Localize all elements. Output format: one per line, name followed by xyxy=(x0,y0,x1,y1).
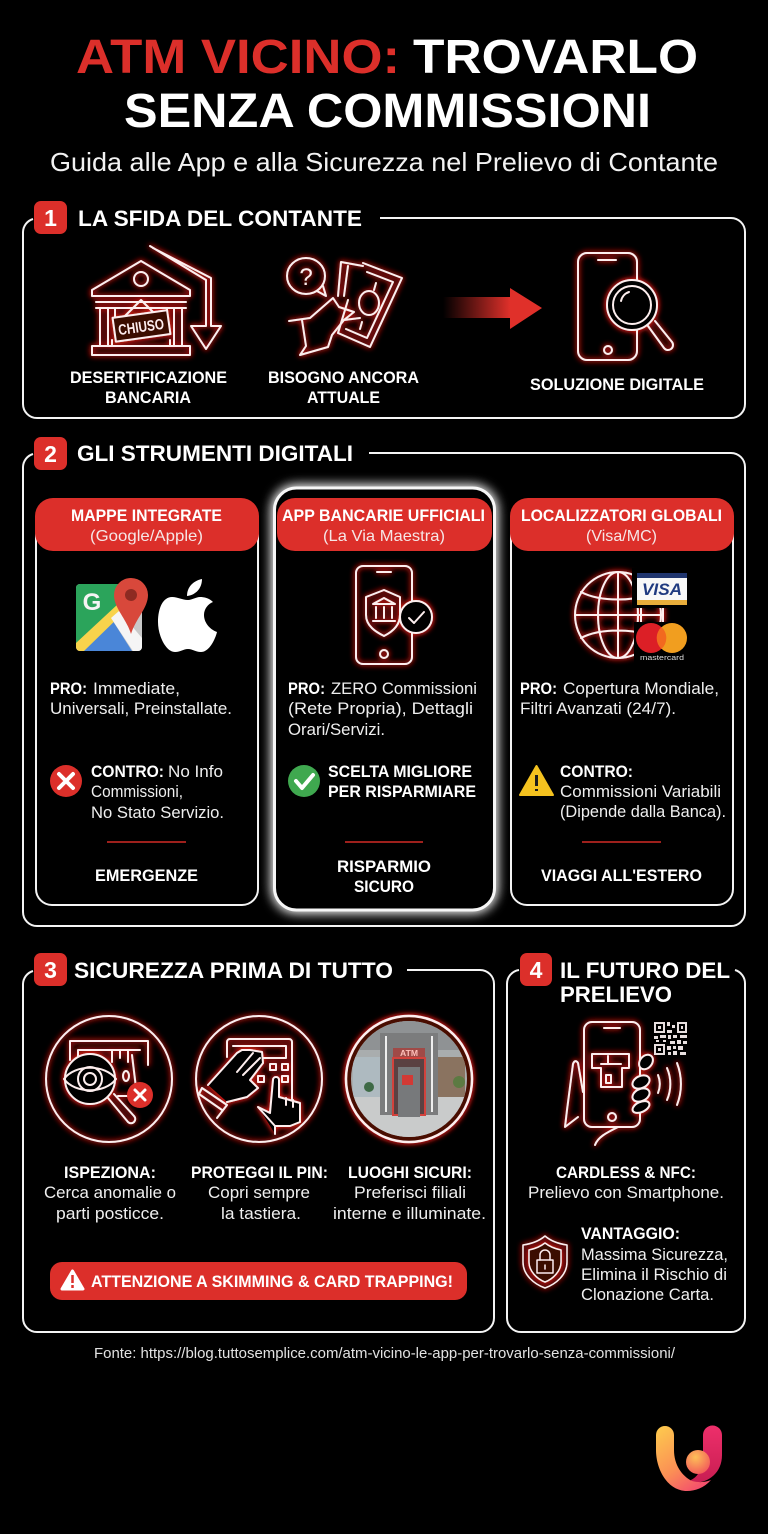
icon: red x badge xyxy=(127,1082,153,1108)
tip: ispeziona: Cerca anomalie o xyxy=(44,1183,176,1202)
title: ATM VICINO: xyxy=(76,31,400,84)
title: SENZA COMMISSIONI xyxy=(124,85,651,138)
pro text xyxy=(520,679,719,718)
best choice text xyxy=(328,762,476,801)
advantage text: Elimina il Rischio di xyxy=(581,1265,727,1284)
advantage text: Clonazione Carta. xyxy=(581,1285,714,1304)
card header: LOCALIZZATORI GLOBALI xyxy=(521,507,722,525)
tip: luoghi sicuri: LUOGHI SICURI: xyxy=(348,1163,472,1182)
pro text: Immediate, xyxy=(93,679,180,698)
heading: gli strumenti digitali: GLI STRUMENTI DIGITALI xyxy=(77,441,353,466)
label: bisogno ancora attuale: ATTUALE xyxy=(307,389,380,407)
heading: la sfida del contante: LA SFIDA DEL CONTANTE xyxy=(78,206,362,231)
card header xyxy=(35,498,259,551)
tip: proteggi il pin: Copri sempre xyxy=(208,1183,310,1202)
icon: visa card: VISA xyxy=(642,580,682,599)
contro text: Commissioni Variabili xyxy=(560,782,721,801)
use case: viaggi all'estero: VIAGGI ALL'ESTERO xyxy=(541,866,702,885)
icon: hand holding cash with question: ? xyxy=(299,264,313,291)
icon: globe xyxy=(575,572,663,658)
icon: qr code xyxy=(654,1022,687,1055)
source line: Fonte: https://blog.tuttosemplice.com/atm-vicino-le-app-per-trovarlo-senza-commissioni/ xyxy=(94,1346,676,1362)
card header xyxy=(510,498,734,551)
icon: inspect eye xyxy=(46,1016,172,1142)
title: TROVARLO xyxy=(413,31,698,84)
icon: warning xyxy=(520,766,553,795)
heading: il futuro del prelievo: PRELIEVO xyxy=(560,982,672,1007)
icon: closed bank with falling arrow xyxy=(92,246,221,355)
icon: visa card xyxy=(632,568,690,608)
advantage text: VANTAGGIO: xyxy=(581,1224,680,1243)
feature text: Prelievo con Smartphone. xyxy=(528,1183,724,1202)
contro text: CONTRO: xyxy=(91,762,164,781)
label: bisogno ancora attuale: BISOGNO ANCORA xyxy=(268,369,419,387)
tip: proteggi il pin: PROTEGGI IL PIN: xyxy=(191,1163,328,1182)
advantage text xyxy=(581,1224,728,1304)
arrow xyxy=(443,288,542,329)
icon: shield lock xyxy=(523,1236,567,1288)
label: desertificazione bancaria: BANCARIA xyxy=(105,389,191,407)
icon: google maps: G xyxy=(83,589,101,616)
tip: ispeziona: parti posticce. xyxy=(56,1204,164,1223)
panel: gli strumenti digitali xyxy=(23,437,745,926)
pro text: ZERO Commissioni xyxy=(331,679,477,698)
tip: ispeziona xyxy=(44,1163,176,1223)
card header: (La Via Maestra) xyxy=(323,528,445,545)
contro text: (Dipende dalla Banca). xyxy=(560,802,726,821)
photo: atm in safe lobby: ATM xyxy=(400,1049,418,1058)
use case: emergenze: EMERGENZE xyxy=(95,866,198,885)
label: desertificazione bancaria xyxy=(70,369,227,407)
contro text xyxy=(560,762,726,821)
icon: green check xyxy=(288,765,320,797)
card: localizzatori globali xyxy=(510,498,734,905)
icon: phone in hand with card xyxy=(565,1022,681,1145)
icon: red x xyxy=(50,765,82,797)
alert banner: ATTENZIONE A SKIMMING & CARD TRAPPING! xyxy=(91,1272,453,1291)
pro text: Orari/Servizi. xyxy=(288,720,385,739)
title xyxy=(76,31,698,138)
label: soluzione digitale: SOLUZIONE DIGITALE xyxy=(530,376,704,394)
pro text xyxy=(50,679,232,718)
pro text xyxy=(288,679,477,739)
panel: la sfida del contante xyxy=(23,201,745,418)
icon: bank app on phone xyxy=(356,566,432,664)
section badge 1: 1 xyxy=(44,205,57,231)
logo xyxy=(656,1426,722,1491)
pro text: (Rete Propria), Dettagli xyxy=(288,699,473,718)
subtitle: Guida alle App e alla Sicurezza nel Prelievo di Contante xyxy=(50,147,718,177)
pro text: PRO: xyxy=(288,679,325,698)
label: desertificazione bancaria: DESERTIFICAZIONE xyxy=(70,369,227,387)
section badge 4: 4 xyxy=(530,957,543,983)
photo: atm in safe lobby xyxy=(346,1016,472,1142)
section badge 3: 3 xyxy=(44,957,57,983)
pro text: PRO: xyxy=(520,679,557,698)
section badge 3 xyxy=(34,953,67,986)
card header: APP BANCARIE UFFICIALI xyxy=(282,507,485,525)
heading: il futuro del prelievo xyxy=(560,958,730,1007)
card header: (Visa/MC) xyxy=(586,528,657,545)
icon: mastercard xyxy=(634,622,690,664)
contro text: Commissioni, xyxy=(91,782,183,801)
section badge 1 xyxy=(34,201,67,234)
contro text: No Info xyxy=(168,762,223,781)
card header: (Google/Apple) xyxy=(90,528,203,545)
tip: ispeziona: ISPEZIONA: xyxy=(64,1163,156,1182)
panel: il futuro del prelievo xyxy=(507,953,745,1332)
section badge 2 xyxy=(34,437,67,470)
use case: risparmio sicuro: SICURO xyxy=(354,877,414,896)
tip: luoghi sicuri xyxy=(333,1163,486,1223)
use case: risparmio sicuro: RISPARMIO xyxy=(337,857,431,876)
icon: phone with magnifier xyxy=(578,253,673,360)
tip: proteggi il pin xyxy=(191,1163,328,1223)
tip: proteggi il pin: la tastiera. xyxy=(221,1204,301,1223)
use case: risparmio sicuro xyxy=(337,857,431,896)
heading: il futuro del prelievo: IL FUTURO DEL xyxy=(560,958,730,983)
tip: luoghi sicuri: Preferisci filiali xyxy=(354,1183,466,1202)
tip: luoghi sicuri: interne e illuminate. xyxy=(333,1204,486,1223)
pro text: Copertura Mondiale, xyxy=(563,679,719,698)
section badge 4 xyxy=(520,953,552,986)
pro text: Filtri Avanzati (24/7). xyxy=(520,699,676,718)
card header xyxy=(277,498,492,551)
alert banner xyxy=(50,1262,467,1300)
feature text xyxy=(528,1163,724,1202)
card header: MAPPE INTEGRATE xyxy=(71,507,222,525)
label: bisogno ancora attuale xyxy=(268,369,419,407)
icon: google maps xyxy=(76,578,148,651)
contro text xyxy=(91,762,224,822)
best choice text: SCELTA MIGLIORE xyxy=(328,762,472,781)
icon: mastercard: mastercard xyxy=(640,655,684,662)
icon: hand holding cash with question xyxy=(287,258,402,355)
heading: sicurezza prima di tutto: SICUREZZA PRIMA DI TUTTO xyxy=(74,958,393,983)
card: mappe integrate xyxy=(35,498,259,905)
icon: cover pin xyxy=(196,1016,322,1142)
advantage text: Massima Sicurezza, xyxy=(581,1245,728,1264)
panel: sicurezza prima di tutto xyxy=(23,953,494,1332)
pro text: Universali, Preinstallate. xyxy=(50,699,232,718)
feature text: CARDLESS & NFC: xyxy=(556,1163,696,1182)
contro text: No Stato Servizio. xyxy=(91,803,224,822)
card: app bancarie ufficiali xyxy=(274,488,494,910)
icon: closed bank with falling arrow: CHIUSO xyxy=(117,316,165,339)
section badge 2: 2 xyxy=(44,441,57,467)
icon: apple xyxy=(158,579,217,652)
best choice text: PER RISPARMIARE xyxy=(328,782,476,801)
icon: alert triangle xyxy=(62,1271,83,1289)
contro text: CONTRO: xyxy=(560,762,633,781)
pro text: PRO: xyxy=(50,679,87,698)
